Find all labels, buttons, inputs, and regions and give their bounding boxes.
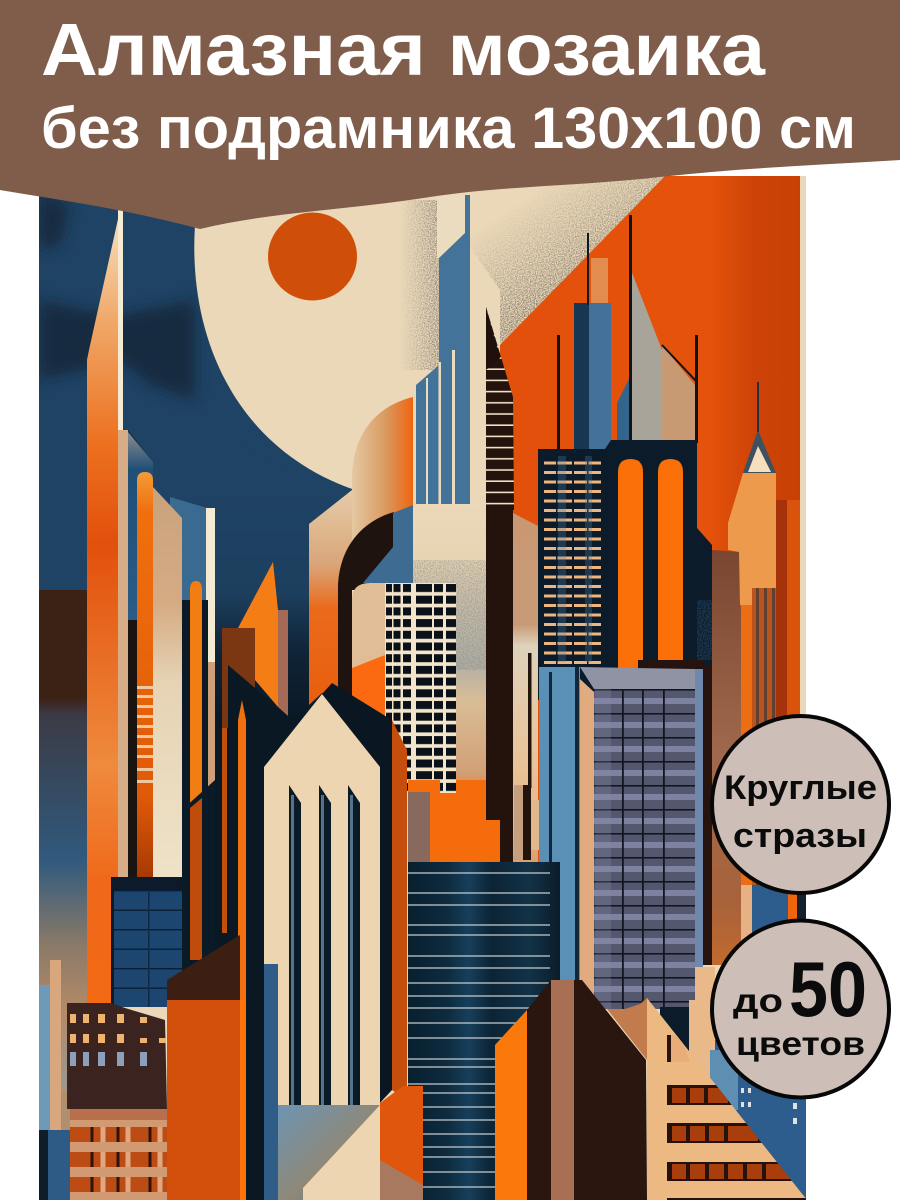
dark arch [338, 512, 394, 700]
right lower strip [710, 885, 806, 1200]
painting [39, 176, 807, 1200]
dark office building [538, 440, 712, 700]
orange arched windows [618, 459, 712, 668]
tan panel under arch [352, 583, 385, 668]
badge: up to 50 colours: 50 [789, 945, 867, 1033]
tower column speckle [400, 200, 440, 370]
navy glass building [408, 862, 560, 1200]
pencil tower [728, 382, 800, 905]
rounded orange column [137, 472, 153, 877]
badge: round rhinestones: Круглые [724, 769, 877, 807]
tan triangular building [647, 998, 807, 1200]
background spires [557, 215, 698, 450]
brick building [70, 1109, 167, 1200]
lower left pale column [39, 960, 70, 1130]
sky speckle [472, 176, 664, 345]
badge: up to 50 colours: цветов [736, 1025, 865, 1062]
striped black tower [486, 307, 514, 862]
blue and cream tower [170, 497, 215, 960]
corner window lights [741, 1088, 797, 1124]
cream sky and edge strip [122, 176, 806, 1190]
title line 2: без подрамника 130х100 см [41, 96, 856, 161]
badge: up to 50 colours: до [733, 982, 783, 1019]
foreground dark tower [495, 980, 647, 1200]
moon [194, 176, 352, 489]
dark clouds [39, 190, 195, 400]
cream house [264, 694, 380, 1105]
sun [268, 212, 357, 300]
tan strip beside striped tower [513, 513, 539, 862]
orange front building [167, 935, 246, 1200]
grey office building [580, 660, 712, 1010]
central blue tower [416, 195, 470, 504]
orange spire building [222, 562, 288, 728]
house base [264, 964, 423, 1200]
tan slanted tower [153, 487, 182, 877]
dark blue window block [111, 877, 190, 1007]
header banner [0, 0, 900, 229]
tall spire tower [87, 210, 153, 1003]
left sky column [39, 590, 87, 1130]
orange sky [500, 176, 800, 900]
dark side of cream house [215, 665, 440, 1200]
deep navy city backdrop [190, 595, 331, 966]
stepped tan block [660, 967, 738, 1110]
badge: round rhinestones: стразы [733, 817, 867, 855]
arch dome [352, 397, 413, 541]
blue glass building [539, 667, 580, 987]
title line 1: Алмазная мозаика [41, 8, 766, 91]
badge: up to 50 colours [712, 920, 889, 1098]
navy sky corner fix [350, 488, 352, 489]
brown window building [67, 1003, 167, 1109]
cream central block [413, 567, 486, 780]
blue arch panel [363, 505, 413, 583]
right brown building [712, 550, 741, 965]
speckled grey patch [413, 560, 486, 670]
lower left blue block [39, 1130, 70, 1200]
navy sky [39, 196, 352, 590]
orange panel under arch [352, 655, 385, 716]
grid building [385, 583, 456, 793]
badge: round rhinestones [712, 716, 889, 893]
tan and orange column [309, 490, 352, 705]
